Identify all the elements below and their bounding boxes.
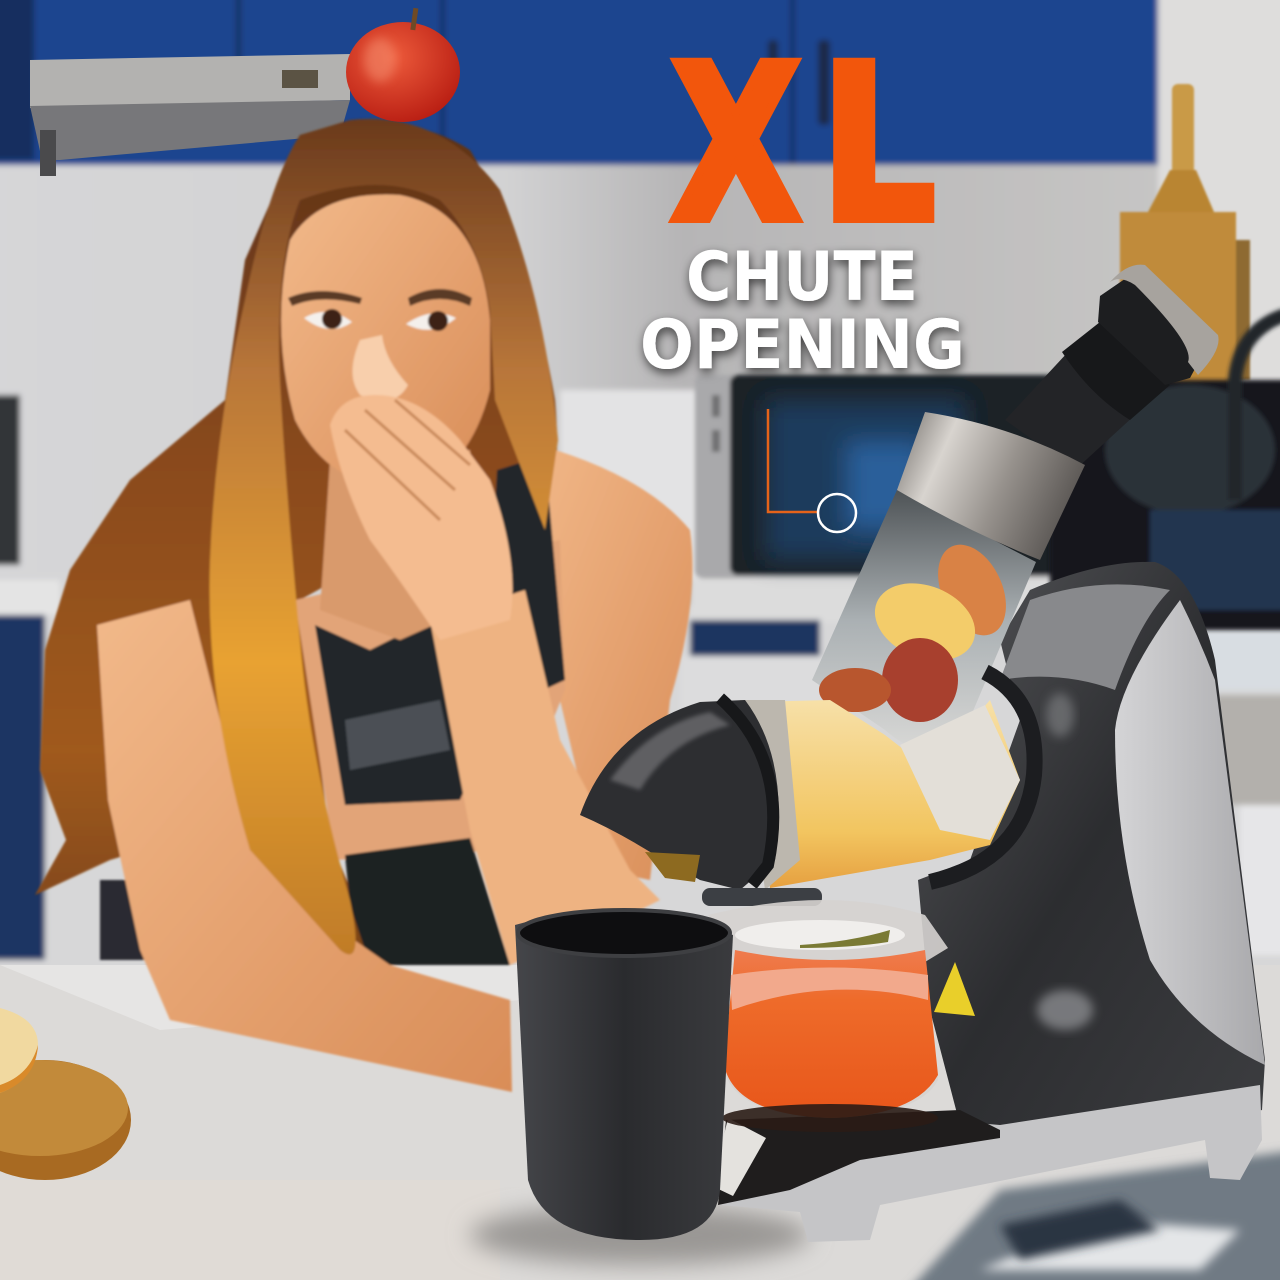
juicer bbox=[515, 265, 1265, 1242]
outlet cap bbox=[580, 700, 779, 890]
horizontal bowl bbox=[750, 700, 1020, 888]
neck bbox=[320, 450, 490, 640]
wooden utensils on wall bbox=[1120, 84, 1250, 390]
range hood bbox=[30, 54, 350, 176]
shoulder and left arm bbox=[520, 440, 692, 880]
leggings bbox=[345, 838, 510, 965]
dark kettle and background appliances bbox=[1050, 315, 1280, 630]
right arm bbox=[97, 600, 512, 1092]
heading: XL: L bbox=[821, 21, 935, 269]
juicer body bbox=[918, 562, 1265, 1130]
heading: chute opening bbox=[640, 238, 965, 385]
heading: chute opening: CHUTE bbox=[686, 238, 918, 317]
heading: XL: X bbox=[672, 21, 800, 269]
warning label bbox=[934, 962, 975, 1016]
rear gasket bbox=[930, 672, 1035, 882]
juicer base bbox=[720, 1085, 1262, 1242]
microwave bbox=[695, 375, 1060, 577]
clear chute bbox=[812, 490, 1036, 750]
eyes bbox=[304, 312, 352, 329]
head bbox=[281, 195, 490, 490]
heading: chute opening: OPENING bbox=[640, 306, 965, 385]
torso bbox=[295, 540, 565, 860]
fruit in chute bbox=[925, 534, 1019, 646]
sports bra bbox=[315, 455, 565, 805]
cutting board with fruit bbox=[0, 1008, 131, 1180]
hand over mouth bbox=[330, 395, 512, 640]
woman bbox=[35, 119, 692, 1092]
countertop bbox=[0, 965, 1280, 1280]
sticker on base bbox=[712, 1118, 766, 1196]
callout marker bbox=[768, 409, 856, 532]
pusher tube bbox=[1005, 265, 1219, 470]
juice jug bbox=[708, 900, 948, 1118]
eyebrows bbox=[288, 291, 362, 306]
hair: back bbox=[35, 123, 557, 960]
spout under bowl bbox=[702, 888, 822, 906]
black pulp cup bbox=[515, 912, 733, 1240]
raised forearm bbox=[430, 590, 660, 965]
heading: XL bbox=[672, 21, 935, 269]
hair: front strands bbox=[210, 119, 558, 954]
steel collar bbox=[897, 412, 1085, 560]
apple on head bbox=[346, 8, 460, 122]
nose bbox=[352, 335, 408, 401]
